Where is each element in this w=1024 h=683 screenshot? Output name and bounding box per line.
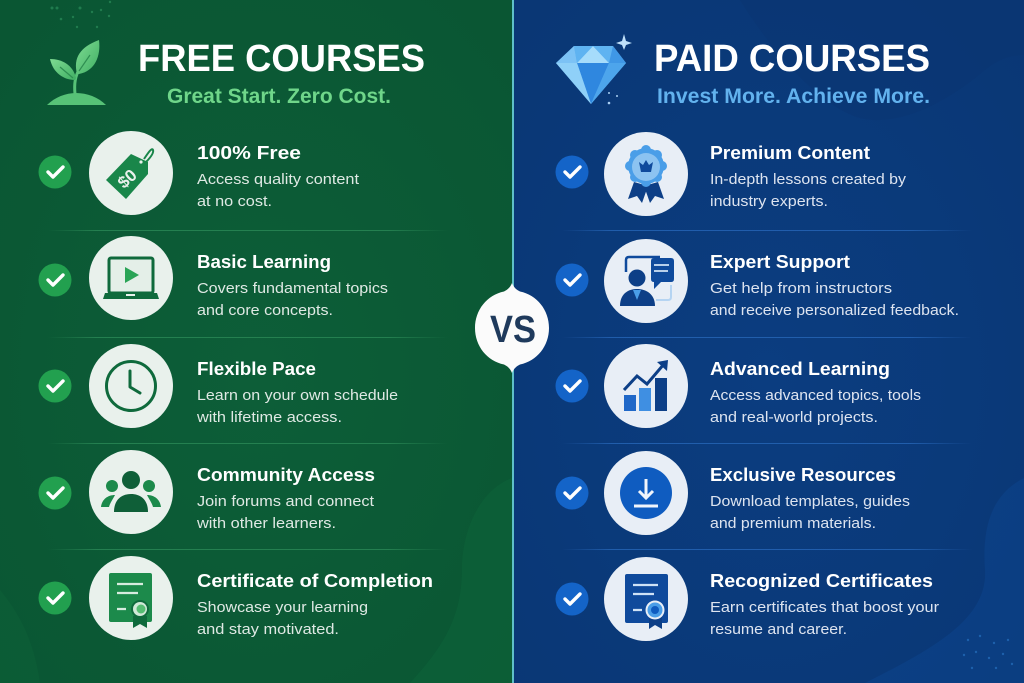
item: premium content: industry experts. (710, 194, 828, 210)
item: exclusive resources: Download templates, guides (710, 494, 910, 510)
item: 100% free: 100% Free (197, 142, 301, 163)
item: advanced learning: Access advanced topics, tools (710, 388, 921, 404)
item: 100% free (38, 131, 359, 215)
heading: paid courses: PAID COURSES (654, 38, 930, 80)
item: recognized certificates (556, 557, 939, 641)
item: certificate of completion (38, 556, 433, 640)
item: flexible pace: Learn on your own schedule (197, 388, 398, 404)
subheading: paid courses: Invest More. Achieve More. (657, 85, 930, 108)
item: expert support: Get help from instructors (710, 281, 892, 297)
item: basic learning: and core concepts. (197, 303, 333, 319)
heading: free courses: FREE COURSES (138, 38, 425, 80)
item: community access: Join forums and connect (197, 494, 374, 510)
item: flexible pace (38, 344, 398, 428)
item: flexible pace: with lifetime access. (196, 410, 342, 426)
item: basic learning (38, 236, 388, 320)
icon: seedling (47, 40, 106, 105)
item: expert support: Expert Support (710, 251, 850, 272)
icon: diamond (556, 34, 632, 104)
item: premium content: Premium Content (710, 142, 870, 163)
item: community access (38, 450, 375, 534)
item: flexible pace: Flexible Pace (197, 358, 316, 379)
item: recognized certificates: resume and career. (710, 622, 847, 638)
item: recognized certificates: Earn certificates that boost your (710, 600, 939, 616)
item: premium content: In-depth lessons created by (710, 172, 907, 188)
item: advanced learning: Advanced Learning (710, 358, 890, 379)
panel: free courses (0, 0, 513, 683)
item: community access: Community Access (197, 464, 375, 485)
item: 100% free: $0 (114, 166, 141, 192)
item: exclusive resources: and premium materials. (710, 516, 876, 532)
subheading: free courses: Great Start. Zero Cost. (167, 85, 391, 108)
item: 100% free: Access quality content (197, 172, 359, 188)
item: certificate of completion: and stay motivated. (197, 622, 339, 638)
panel: paid courses (513, 0, 1024, 683)
item: advanced learning (556, 344, 921, 428)
item: community access: with other learners. (196, 516, 336, 532)
item: basic learning: Basic Learning (197, 251, 331, 272)
item: premium content (556, 132, 907, 216)
VS badge: VS (490, 309, 536, 351)
item: expert support: and receive personalized feedback. (710, 303, 959, 319)
item: basic learning: Covers fundamental topics (197, 281, 388, 297)
item: expert support (556, 239, 959, 323)
item: certificate of completion: Certificate of Completion (197, 570, 433, 591)
item: recognized certificates: Recognized Certificates (710, 570, 933, 591)
item: 100% free: at no cost. (197, 194, 272, 210)
VS badge (475, 283, 549, 373)
item: advanced learning: and real-world projects. (710, 410, 878, 426)
item: exclusive resources: Exclusive Resources (710, 464, 896, 485)
item: exclusive resources (556, 451, 910, 535)
item: certificate of completion: Showcase your learning (197, 600, 368, 616)
